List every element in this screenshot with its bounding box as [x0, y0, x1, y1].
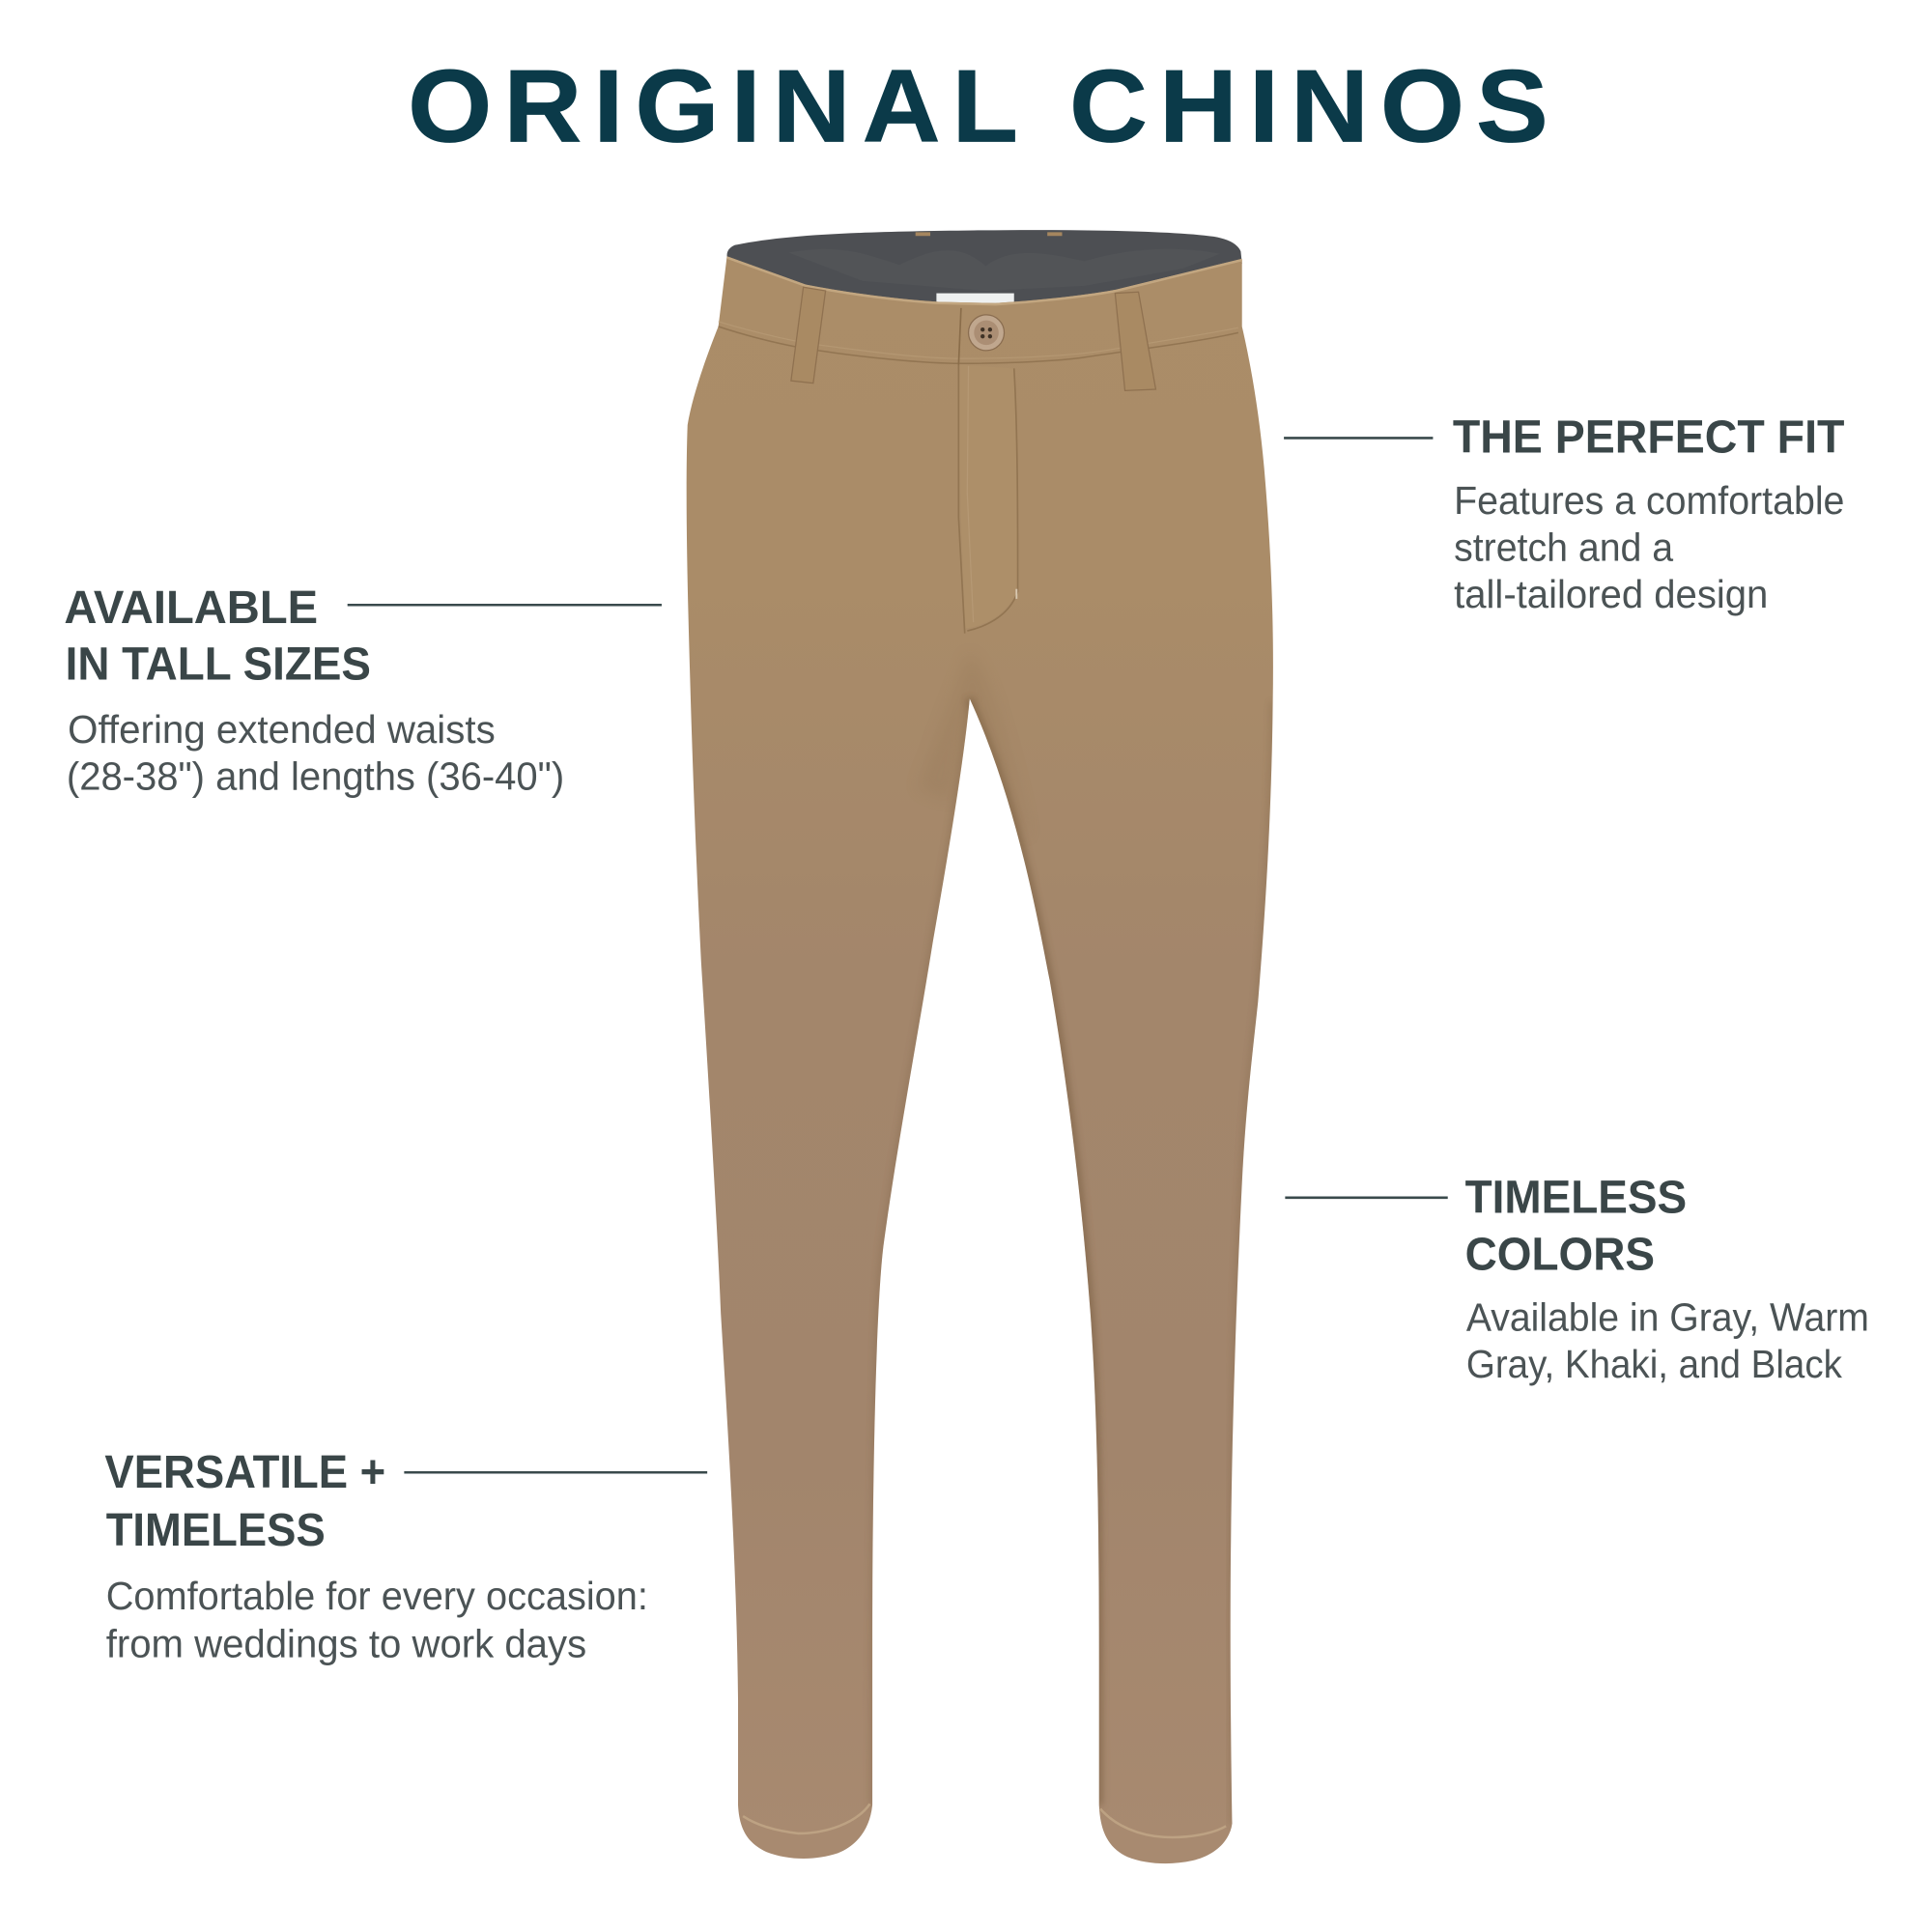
heading: COLORS [1465, 1229, 1655, 1280]
callout: available in tall sizes [64, 582, 662, 799]
right inner edge shadow [970, 698, 1099, 1805]
lining wrinkles [788, 249, 1220, 291]
heading: TIMELESS [106, 1505, 326, 1556]
pants body [687, 256, 1273, 1863]
description: Available in Gray, Warm [1466, 1295, 1869, 1340]
pants interior lining [727, 230, 1242, 305]
description: Comfortable for every occasion: [106, 1574, 648, 1618]
rear belt loop stitches [916, 233, 1062, 236]
fly placket lines [958, 365, 1018, 634]
description: (28-38") and lengths (36-40") [67, 754, 564, 799]
heading: TIMELESS [1465, 1173, 1687, 1224]
heading: AVAILABLE [64, 582, 318, 634]
waistband stitch [719, 322, 1238, 358]
heading: THE PERFECT FIT [1453, 412, 1844, 464]
description: Gray, Khaki, and Black [1466, 1342, 1842, 1386]
fly placket [958, 365, 1018, 629]
top edge of waistband highlight [727, 258, 1242, 304]
description: Offering extended waists [68, 707, 496, 752]
bartack [1015, 589, 1017, 599]
description: from weddings to work days [106, 1622, 586, 1666]
left belt loop [791, 287, 826, 384]
leader line [404, 1471, 707, 1473]
description: stretch and a [1454, 525, 1673, 569]
leader line [1284, 437, 1433, 439]
illustration: khaki chino pants [687, 230, 1273, 1863]
right hem stitch [1100, 1808, 1226, 1837]
button [969, 315, 1005, 351]
inner label [936, 294, 1014, 304]
leader line [1285, 1197, 1448, 1199]
right belt loop [1115, 292, 1155, 390]
heading: IN TALL SIZES [66, 639, 371, 690]
heading: VERSATILE + [104, 1447, 385, 1498]
description: tall-tailored design [1454, 572, 1768, 616]
left hem stitch [743, 1804, 870, 1833]
description: Features a comfortable [1454, 478, 1844, 523]
callout: timeless colors [1285, 1173, 1869, 1386]
pants shading clipped to the garment [872, 653, 1273, 1824]
crotch shading [918, 653, 1029, 838]
waistband seam [719, 327, 1238, 363]
callout: the perfect fit [1284, 412, 1844, 616]
fly stitch [967, 366, 974, 622]
callout: versatile + timeless [104, 1447, 707, 1666]
title: ORIGINAL CHINOS [408, 48, 1560, 164]
left inner edge shadow [872, 698, 970, 1805]
leader line [348, 604, 662, 606]
right outer edge shadow [1231, 702, 1273, 1824]
waistband tab edge [958, 308, 961, 365]
